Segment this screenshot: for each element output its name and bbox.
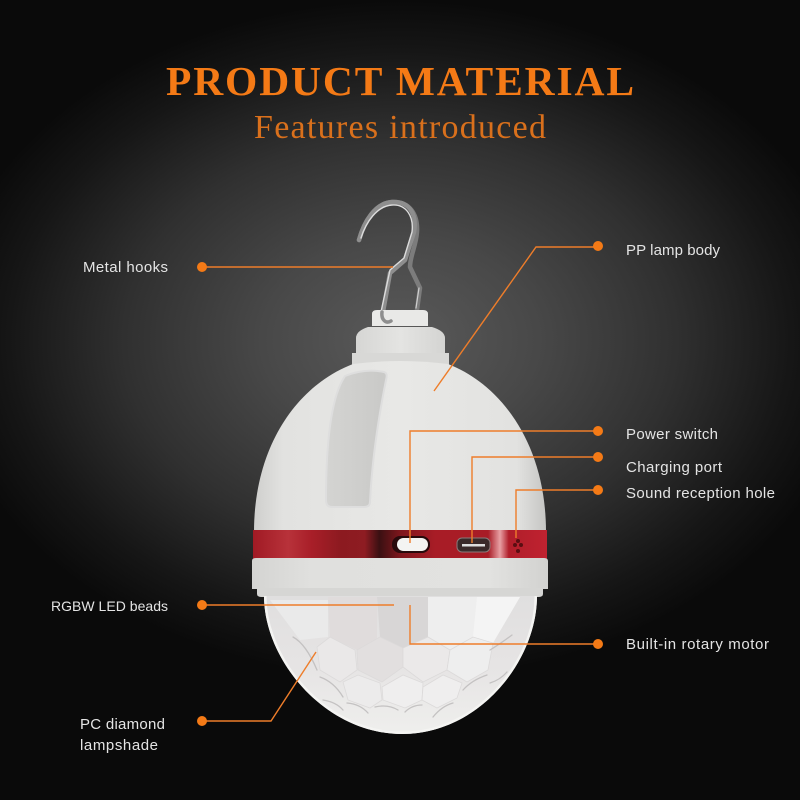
lamp body [254, 361, 546, 532]
white ring [252, 558, 548, 589]
callout: built-in rotary motor [410, 605, 769, 653]
callout: sound reception hole [516, 485, 775, 538]
charging port [457, 538, 490, 552]
lamp product illustration [252, 202, 548, 736]
callout: power switch: Power switch [626, 426, 718, 443]
red band [253, 530, 547, 559]
switch button [397, 538, 428, 551]
callout: PC diamond lampshade: PC diamond [80, 716, 165, 733]
callout: metal hooks [83, 259, 393, 276]
callout: built-in rotary motor: Built-in rotary motor [626, 636, 769, 653]
title: PRODUCT MATERIAL [166, 58, 634, 104]
callout: PC diamond lampshade [80, 652, 316, 754]
callout: RGBW LED beads [51, 598, 394, 614]
callout: PP lamp body [434, 241, 720, 391]
callout: charging port [472, 452, 723, 543]
callout: PC diamond lampshade: lampshade [80, 737, 158, 754]
callout: charging port: Charging port [626, 459, 723, 476]
power switch [392, 536, 430, 553]
sound holes [513, 539, 523, 553]
subtitle: Features introduced [254, 109, 546, 146]
callout: PP lamp body: PP lamp body [626, 242, 720, 259]
callout: metal hooks: Metal hooks [83, 259, 168, 276]
ring lower step [257, 588, 543, 597]
diamond lampshade [260, 596, 540, 736]
lamp neck [352, 310, 449, 367]
body grip recess [326, 371, 387, 507]
metal hook [359, 202, 420, 312]
callout: RGBW LED beads: RGBW LED beads [51, 598, 168, 614]
callout: power switch [410, 426, 718, 543]
callout: sound reception hole: Sound reception hole [626, 485, 775, 502]
